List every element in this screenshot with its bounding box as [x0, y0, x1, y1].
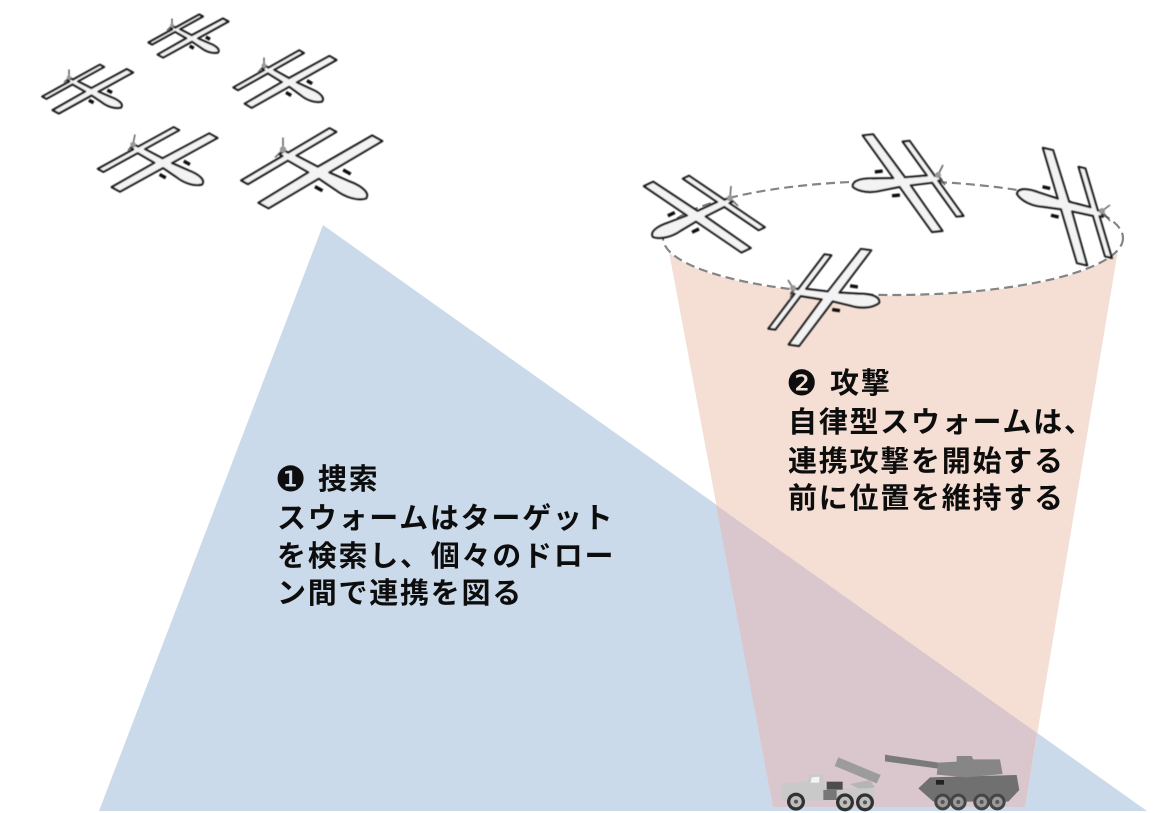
heading: step 2: 攻撃 [830, 367, 892, 400]
panel: search cone (blue triangle) [99, 225, 1147, 811]
dashed orbit ellipse [663, 181, 1123, 295]
drone formation: search swarm [33, 9, 424, 231]
text block: step 1 search [275, 460, 615, 610]
heading: step 1: 捜索 [318, 463, 380, 496]
description: step 1: を検索し、個々のドロー [277, 540, 615, 573]
heading: step 2: ❷ [786, 364, 817, 404]
icon: armored tank [885, 755, 1019, 810]
heading: step 1 [275, 460, 380, 500]
icon: rocket launcher truck [780, 757, 881, 811]
description: step 1 [277, 502, 615, 610]
icon: orbit drone top [819, 131, 976, 236]
description: step 2: 自律型スウォームは、 [788, 406, 1095, 439]
icon: drone top [140, 9, 251, 70]
icon: drone left [33, 58, 159, 128]
icon: drone lower right [227, 118, 424, 231]
icon: drone right [223, 43, 365, 125]
text block: step 2 attack [786, 364, 1095, 515]
description: step 1: ン間で連携を図る [277, 577, 523, 610]
description: step 2 [788, 406, 1095, 515]
drone formation: attack swarm [605, 131, 1119, 352]
description: step 2: 前に位置を維持する [788, 482, 1065, 515]
icon: orbit drone bottom [756, 244, 914, 352]
description: step 1: スウォームはターゲット [277, 502, 614, 535]
overlap of search and attack cones [716, 505, 1037, 807]
panel: attack cone (pink beam) [669, 250, 1118, 807]
heading: step 1: ❶ [275, 460, 306, 500]
icon: orbit drone left [605, 168, 780, 271]
description: step 2: 連携攻撃を開始する [788, 445, 1065, 478]
heading: step 2 [786, 364, 892, 404]
icon: orbit drone right [1000, 138, 1119, 273]
icon: drone lower left [85, 119, 252, 211]
